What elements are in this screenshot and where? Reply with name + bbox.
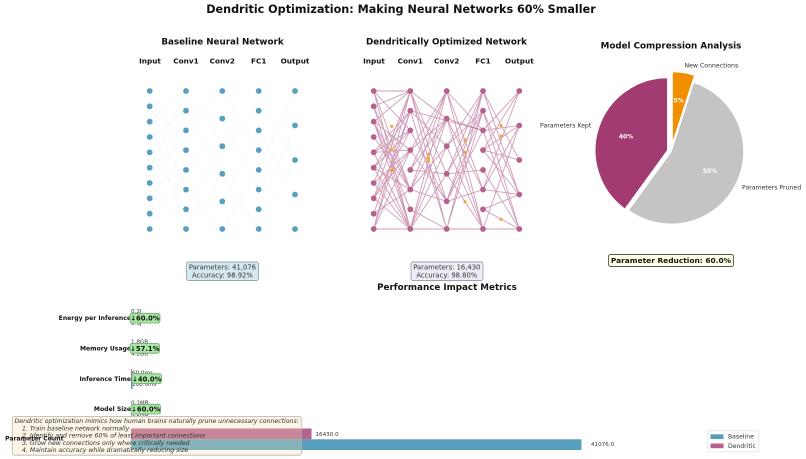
dendritic nodes xyxy=(371,88,522,232)
explanatory note: 3. Grow new connections only where critically needed xyxy=(22,439,190,447)
pie chart xyxy=(595,72,744,224)
panel: dendritically optimized network xyxy=(363,38,534,280)
layer labels: baseline: Input xyxy=(139,57,161,66)
layer labels: baseline xyxy=(139,57,310,66)
row: memory usage: ↓57.1% xyxy=(130,345,160,353)
heading: compression: Model Compression Analysis xyxy=(601,41,741,51)
row: memory usage: 1.8GB xyxy=(131,340,148,346)
row: parameter count bars: 16430.0 xyxy=(316,432,339,438)
row: inference time: ↓40.0% xyxy=(132,375,162,383)
row: energy per inference xyxy=(59,309,160,327)
row: inference time: Inference Time xyxy=(80,376,131,383)
layer labels: dendritic: Output xyxy=(505,57,534,66)
explanatory note: 4. Maintain accuracy while dramatically reducing size xyxy=(22,446,188,454)
wedge: new connections xyxy=(672,72,695,144)
row: parameter count bars: 41076.0 xyxy=(591,442,615,448)
layer labels: dendritic: Conv1 xyxy=(398,57,423,66)
row: inference time xyxy=(80,369,162,389)
pruned connections xyxy=(374,91,519,229)
stats box: dendritic: Accuracy: 98.80% xyxy=(416,271,478,279)
heading: baseline network: Baseline Neural Network xyxy=(161,38,284,48)
row: energy per inference: Energy per Inference xyxy=(59,315,131,322)
panel: model compression analysis xyxy=(540,41,801,266)
pie labels: Parameters Pruned xyxy=(742,185,801,192)
pie percentages: 40% xyxy=(619,134,633,141)
stats box: baseline xyxy=(186,262,258,280)
row: model size: 0.2MB xyxy=(131,412,149,418)
explanatory note xyxy=(12,416,301,455)
pie percentages xyxy=(619,98,717,175)
heading: dendritic network: Dendritically Optimized Network xyxy=(366,38,527,48)
row: parameter count bars xyxy=(131,428,615,450)
legend: Dendritic xyxy=(728,443,756,450)
row: energy per inference: 0.2J xyxy=(131,309,142,315)
row: memory usage: 4.2GB xyxy=(131,352,148,358)
layer labels: dendritic: Input xyxy=(363,57,385,66)
row: inference time: 60.0ms xyxy=(132,370,153,376)
layer labels: dendritic: Conv2 xyxy=(434,57,459,66)
baseline nodes xyxy=(147,88,298,232)
explanatory note: Dendritic optimization mimics how human brains naturally prune unnecessary connections: xyxy=(14,417,299,425)
layer labels: dendritic: FC1 xyxy=(475,57,491,66)
layer labels: baseline: FC1 xyxy=(251,57,266,66)
row: model size: Model Size xyxy=(94,406,131,413)
new connection markers xyxy=(390,124,503,221)
label: parameter count: Parameter Count xyxy=(5,436,64,442)
title: Dendritic Optimization: Making Neural Networks 60% Smaller xyxy=(206,3,596,16)
stats box: dendritic xyxy=(411,262,483,280)
row: model size: 0.1MB xyxy=(131,400,149,406)
row: energy per inference: ↓60.0% xyxy=(130,315,160,323)
pie labels: Parameters Kept xyxy=(540,123,592,130)
wedge: parameters kept xyxy=(595,78,668,209)
heading: performance: Performance Impact Metrics xyxy=(377,283,517,293)
legend: Baseline xyxy=(728,434,754,441)
stats box: baseline: Parameters: 41,076 xyxy=(189,263,256,271)
legend: ↓60.0% xyxy=(716,435,742,443)
pie labels xyxy=(540,62,801,192)
parameter reduction callout: Parameter Reduction: 60.0% xyxy=(611,256,732,265)
panel: performance impact metrics xyxy=(59,283,759,452)
pie percentages: 55% xyxy=(703,168,717,175)
layer labels: baseline: Output xyxy=(281,57,310,66)
layer labels: baseline: Conv1 xyxy=(173,57,199,66)
legend xyxy=(708,431,759,452)
row: energy per inference: 0.5J xyxy=(131,321,142,327)
row: model size xyxy=(94,400,161,418)
row: model size: ↓60.0% xyxy=(131,406,161,414)
explanatory note: 2. Identify and remove 60% of least important connections xyxy=(22,432,206,440)
row: memory usage xyxy=(80,340,160,358)
explanatory note: 1. Train baseline network normally xyxy=(22,424,130,432)
pie labels: New Connections xyxy=(684,62,738,69)
layer labels: baseline: Conv2 xyxy=(210,57,235,66)
stats box: baseline: Accuracy: 98.92% xyxy=(192,271,253,279)
layer labels: dendritic xyxy=(363,57,534,66)
wedge: parameters pruned xyxy=(628,82,744,224)
row: inference time: 100.0ms xyxy=(132,382,156,388)
pie percentages: 5% xyxy=(674,98,684,105)
panel: baseline neural network xyxy=(139,38,310,280)
stats box: dendritic: Parameters: 16,430 xyxy=(413,263,480,271)
row: memory usage: Memory Usage xyxy=(80,346,131,352)
faint baseline connections xyxy=(150,91,295,229)
